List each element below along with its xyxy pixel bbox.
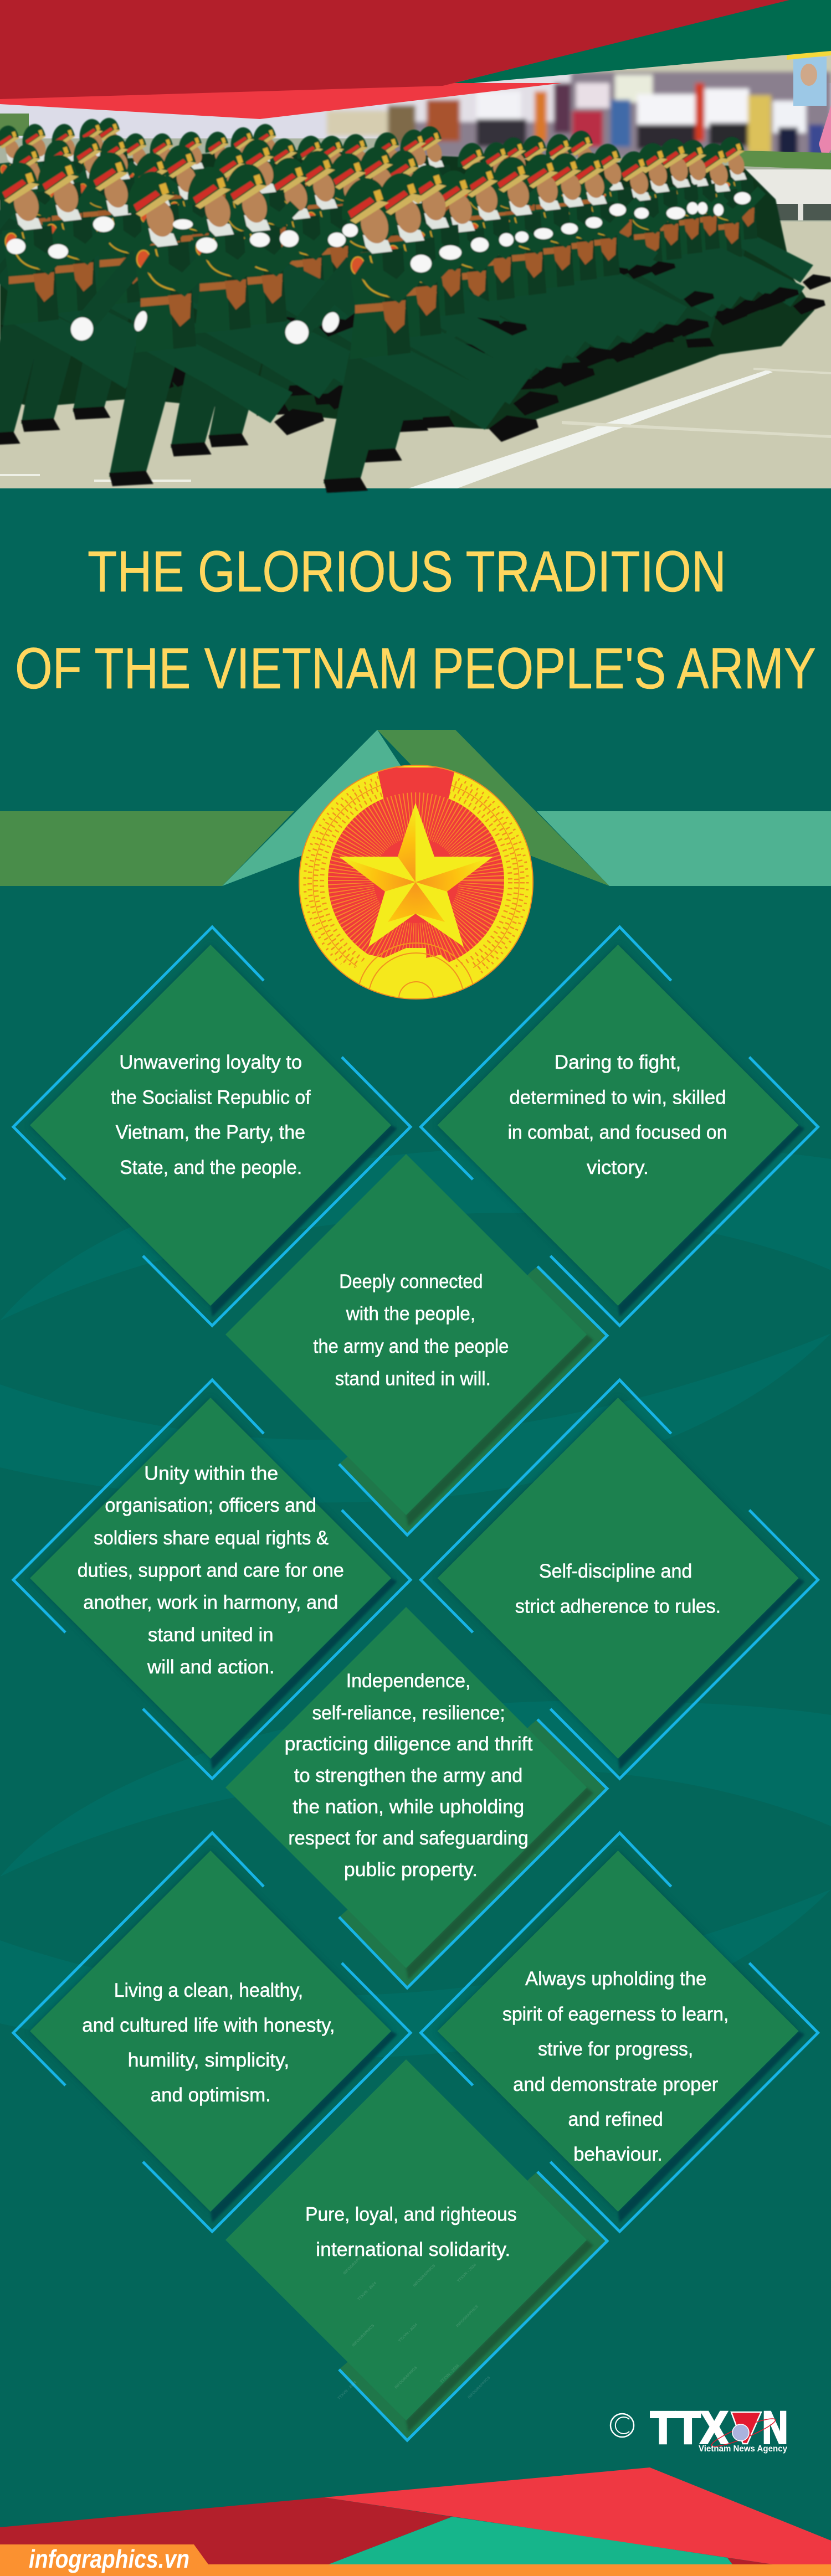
panel: eagerness to learn: strive for progress, — [538, 2038, 693, 2060]
panel: clean healthy life: and optimism. — [151, 2084, 271, 2106]
panel: clean healthy life: humility, simplicity, — [128, 2049, 289, 2071]
copyright mark — [611, 2414, 634, 2437]
photo ground — [0, 44, 831, 488]
panel: unwavering loyalty: State, and the people. — [120, 1157, 302, 1178]
middle rows — [2, 139, 709, 432]
panel: unity within the organisation: will and action. — [147, 1656, 275, 1678]
logo: TTXVN Vietnam News Agency: TTX — [650, 2403, 728, 2453]
panel: eagerness to learn — [421, 1833, 818, 2232]
panel: unwavering loyalty: the Socialist Republic of — [111, 1086, 311, 1109]
emblem star — [339, 803, 493, 947]
panel: unwavering loyalty — [13, 927, 411, 1326]
panel: unwavering loyalty: Vietnam, the Party, the — [116, 1122, 305, 1143]
ribbon behind emblem — [0, 730, 831, 886]
emblem sunburst — [328, 792, 504, 968]
light red wedge — [0, 83, 562, 119]
portrait poster and banner — [793, 57, 831, 161]
title — [15, 539, 816, 701]
panel: eagerness to learn: Always upholding the — [525, 1968, 706, 1990]
watermarks: INFOGRAPHICS — [412, 2264, 437, 2288]
panel: connected with the people: Deeply connected — [339, 1271, 483, 1292]
panel: unity within the organisation: organisation; officers and — [105, 1495, 316, 1516]
panel: international solidarity — [225, 2059, 607, 2440]
road markings — [408, 370, 773, 488]
dark red band — [0, 0, 789, 99]
panel: eagerness to learn: and refined — [568, 2109, 663, 2130]
panel: unity within the organisation: another, work in harmony, and — [83, 1591, 338, 1614]
emblem — [299, 765, 533, 1020]
panel: unity within the organisation — [13, 1380, 411, 1779]
panel: eagerness to learn: spirit of eagerness to learn, — [502, 2003, 729, 2025]
footer shapes — [0, 2467, 831, 2576]
panel: international solidarity: international solidarity. — [316, 2239, 510, 2260]
hero photo: marching soldiers — [0, 44, 831, 493]
emblem wreath — [304, 776, 529, 973]
panel: unity within the organisation: stand united in — [148, 1624, 274, 1646]
green wedge — [443, 0, 831, 86]
white gloves — [7, 192, 751, 347]
watermarks: INFOGRAPHICS — [351, 2323, 376, 2347]
panel: daring to fight: determined to win, skilled — [509, 1086, 726, 1109]
panel: independence and self-reliance: Independence, — [346, 1670, 471, 1692]
panel: self-discipline: strict adherence to rules. — [515, 1595, 721, 1617]
panel: independence and self-reliance: to strengthen the army and — [294, 1765, 522, 1786]
panel: independence and self-reliance: public property. — [344, 1859, 478, 1881]
panel: unity within the organisation: duties, support and care for one — [78, 1559, 344, 1581]
yellow sliver — [787, 50, 831, 60]
logo: TTXVN Vietnam News Agency — [611, 2403, 788, 2454]
watermarks: INFOGRAPHICS — [394, 2366, 418, 2389]
panel: international solidarity: Pure, loyal, and righteous — [305, 2204, 517, 2225]
panel: eagerness to learn: and demonstrate proper — [513, 2074, 719, 2095]
footer site name: infographics.vn — [29, 2544, 189, 2573]
panel: independence and self-reliance: the nation, while upholding — [293, 1796, 524, 1818]
panel: independence and self-reliance: self-reliance, resilience; — [312, 1702, 505, 1724]
panel: unity within the organisation: soldiers share equal rights & — [94, 1527, 329, 1549]
background waves — [0, 1145, 831, 2058]
panel: unity within the organisation: Unity within the — [144, 1463, 278, 1485]
panel: independence and self-reliance: practicing diligence and thrift — [285, 1733, 533, 1755]
panel: clean healthy life: Living a clean, healthy, — [114, 1980, 303, 2001]
panel: daring to fight: Daring to fight, — [555, 1052, 681, 1073]
watermarks: INFOGRAPHICS — [342, 2252, 367, 2275]
panel: connected with the people — [225, 1154, 607, 1535]
watermarks: TTXVN - 2024 — [439, 2364, 460, 2384]
watermarks: TTXVN - 2024 — [357, 2281, 377, 2301]
logo: TTXVN Vietnam News Agency: N — [762, 2403, 788, 2453]
emblem gear — [337, 948, 480, 998]
watermarks: INFOGRAPHICS — [467, 2376, 491, 2399]
panel: independence and self-reliance: respect for and safeguarding — [288, 1827, 529, 1849]
hedge and kerb — [740, 151, 831, 169]
panel: clean healthy life: and cultured life with honesty, — [82, 2015, 335, 2036]
watermarks: TTXVN - 2024 — [398, 2323, 418, 2343]
watermarks: TTXVN - 2024 — [456, 2263, 477, 2283]
logo: TTXVN Vietnam News Agency: Vietnam News Agency — [699, 2444, 787, 2454]
panel: eagerness to learn: behaviour. — [573, 2144, 663, 2165]
panel: connected with the people: the army and the people — [313, 1336, 509, 1357]
panel: unwavering loyalty: Unwavering loyalty to — [119, 1052, 302, 1073]
watermarks: TTXVN - 2024 — [337, 2381, 357, 2400]
header shapes — [0, 0, 831, 119]
panel: self-discipline — [421, 1380, 818, 1779]
panel: connected with the people: stand united in will. — [335, 1368, 491, 1390]
watermarks — [337, 2252, 491, 2400]
dark mass of uniforms — [0, 150, 814, 429]
panel: daring to fight — [421, 927, 818, 1326]
panel: independence and self-reliance — [225, 1607, 607, 1988]
soldiers — [0, 118, 831, 493]
panel: daring to fight: victory. — [587, 1157, 649, 1178]
back rows — [0, 118, 831, 359]
front row — [0, 162, 573, 493]
panel: connected with the people: with the people, — [346, 1303, 475, 1325]
crowd — [327, 72, 831, 163]
watermarks: INFOGRAPHICS — [455, 2304, 480, 2328]
panel: clean healthy life — [13, 1833, 411, 2232]
panel: daring to fight: in combat, and focused on — [507, 1122, 727, 1143]
panel: self-discipline: Self-discipline and — [539, 1560, 692, 1582]
